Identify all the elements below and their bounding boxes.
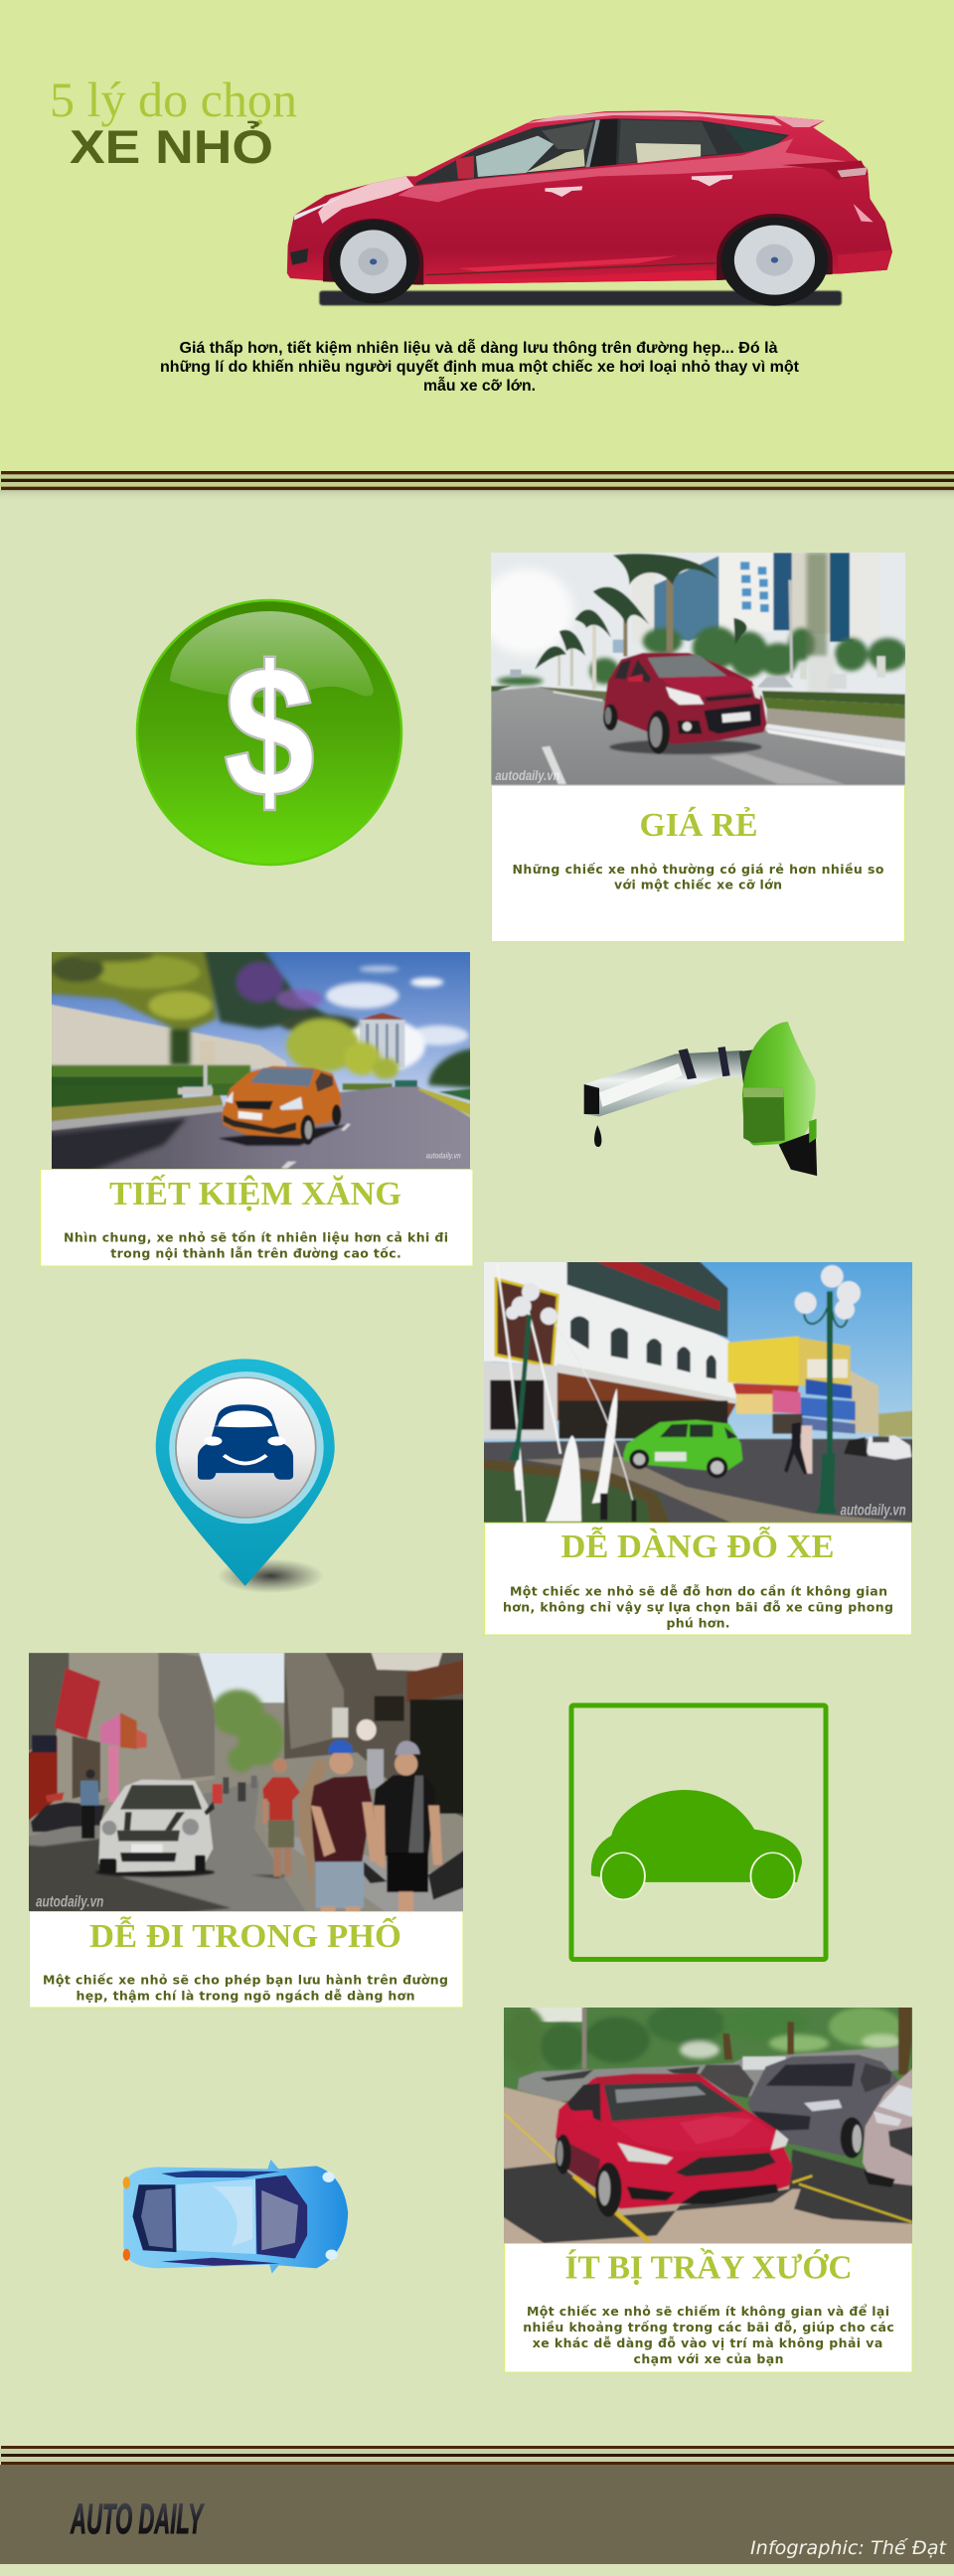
fountain pool — [481, 1465, 670, 1524]
rear wheel — [721, 217, 828, 306]
watermark: autodaily.vn — [426, 1151, 461, 1160]
pedestrian: woman behind — [299, 1757, 329, 1905]
right buildings — [284, 1650, 466, 1819]
description: Những chiếc xe nhỏ thường có giá rẻ hơn nhiều so — [513, 862, 884, 877]
photo: green car by fountain on street — [484, 1262, 912, 1523]
pedestrians — [784, 1422, 809, 1474]
road — [481, 1439, 915, 1524]
intro paragraph — [160, 338, 800, 395]
caption box — [30, 1912, 463, 2008]
description: với một chiếc xe cỡ lớn — [614, 877, 782, 892]
pedestrian: red shirt — [262, 1758, 300, 1876]
icon: green fuel pump nozzle — [584, 1022, 817, 1176]
icon: blue car top view — [123, 2160, 348, 2274]
ground — [501, 2086, 915, 2245]
panel: giá rẻ — [480, 549, 909, 942]
title line 1: 5 lý do chọn — [50, 72, 297, 127]
photo: orange car on tree-lined road — [52, 952, 470, 1169]
description: hẹp, thậm chí là trong ngõ ngách dễ dàng hơn — [76, 1988, 415, 2004]
description: xe khác dễ dàng đỗ vào vị trí mà không phải va — [533, 2335, 882, 2350]
title line 2: XE NHỎ — [70, 120, 273, 173]
description: nhiều khoảng trống trong các bãi đỗ, giúp cho các — [523, 2320, 894, 2334]
yellow bays — [504, 2114, 557, 2163]
pedestrian: maroon shirt — [311, 1740, 380, 1915]
panel: dễ dàng đỗ xe — [481, 1258, 915, 1635]
photo: red hatchback on city road — [491, 553, 905, 785]
description: Nhìn chung, xe nhỏ sẽ tốn ít nhiên liệu hơn cả khi đi — [64, 1230, 448, 1244]
hotel building — [481, 1258, 737, 1399]
credit: Infographic: Thế Đạt — [750, 2537, 948, 2559]
fountain jets — [514, 1388, 617, 1522]
grey SUV — [747, 2055, 898, 2159]
pedestrian: black shirt — [374, 1741, 442, 1915]
ground shadow — [319, 291, 842, 305]
hedges and grass — [48, 1065, 250, 1085]
icon: map pin with smiling car — [156, 1359, 335, 1593]
caption box — [40, 1169, 473, 1266]
heading: DỄ ĐI TRONG PHỐ — [89, 1916, 401, 1955]
scooters — [213, 1776, 257, 1804]
roof highlight — [526, 112, 782, 126]
heading: ÍT BỊ TRẦY XƯỚC — [564, 2248, 853, 2286]
colourful buildings — [727, 1336, 799, 1385]
intro paragraph: Giá thấp hơn, tiết kiệm nhiên liệu và dễ dàng lưu thông trên đường hẹp... Đó là — [179, 338, 778, 357]
panel: tiết kiệm xăng — [40, 949, 475, 1266]
icon: green dollar coin: $ — [225, 629, 314, 835]
description: trong nội thành lẫn trên đường cao tốc. — [110, 1246, 401, 1260]
icon: green dollar coin — [137, 600, 401, 865]
description: chạm với xe của bạn — [634, 2351, 783, 2366]
windows — [416, 118, 789, 185]
description — [503, 1584, 893, 1630]
dappled shadow — [26, 1839, 287, 1915]
pillar — [585, 118, 618, 167]
description: Một chiếc xe nhỏ sẽ chiếm ít không gian và để lại — [527, 2304, 889, 2319]
heading: DỄ DÀNG ĐỖ XE — [560, 1526, 835, 1565]
shadow on ground — [501, 2150, 915, 2243]
red car — [556, 2074, 792, 2217]
panel: ít bị trầy xước — [501, 2004, 915, 2372]
green car — [623, 1420, 742, 1478]
description: hơn, không chỉ vậy sự lựa chọn bãi đỗ xe cũng phong — [503, 1600, 893, 1614]
rear window tone — [618, 120, 717, 164]
car body — [287, 110, 892, 285]
car — [603, 653, 767, 754]
caption box — [485, 1523, 912, 1635]
intro paragraph: mẫu xe cỡ lớn. — [423, 376, 536, 395]
spoiler highlight — [773, 116, 825, 127]
white car — [867, 1435, 911, 1460]
road — [48, 1087, 475, 1175]
quarter glass — [723, 125, 785, 152]
car glyph — [198, 1404, 293, 1480]
photo: red car in parking lot — [504, 2008, 912, 2243]
far row of cars — [518, 2046, 898, 2101]
mirror — [456, 156, 474, 179]
front wheel — [329, 220, 419, 303]
rear seat — [636, 143, 701, 163]
rear details — [781, 161, 869, 180]
description — [43, 1972, 448, 2004]
belt-line highlight — [398, 138, 866, 202]
icon: green car in square frame — [571, 1705, 826, 1960]
hero image: red hatchback side view — [287, 110, 892, 306]
intro paragraph: những lí do khiến nhiều người quyết định mua một chiếc xe hơi loại nhỏ thay vì một — [160, 359, 800, 376]
caption box — [505, 2244, 912, 2372]
caption box — [491, 785, 904, 942]
heading: TIẾT KIỆM XĂNG — [109, 1174, 401, 1212]
lower sill — [458, 255, 678, 271]
description: Một chiếc xe nhỏ sẽ dễ đỗ hơn do cần ít không gian — [510, 1584, 887, 1598]
oil drop — [594, 1125, 601, 1147]
palm trees — [559, 568, 670, 689]
description: Một chiếc xe nhỏ sẽ cho phép bạn lưu hành trên đường — [43, 1972, 448, 1988]
heading: GIÁ RẺ — [640, 806, 757, 844]
parked motorbikes — [31, 1802, 105, 1832]
road — [491, 687, 905, 785]
logo: AUTO DAILY: AUTO DAILY — [70, 2496, 205, 2543]
header background — [0, 0, 954, 490]
right silver SUV — [863, 2066, 915, 2187]
panel: dễ đi trong phố — [26, 1650, 466, 2008]
description — [64, 1230, 448, 1260]
description: phú hơn. — [666, 1616, 729, 1630]
description — [523, 2304, 894, 2366]
car — [219, 1065, 346, 1146]
left buildings — [26, 1650, 215, 1822]
road — [26, 1781, 307, 1915]
street lamps — [509, 1291, 837, 1514]
watermark: autodaily.vn — [36, 1893, 103, 1910]
door handles — [545, 186, 582, 197]
description — [513, 862, 884, 892]
front vent — [290, 248, 308, 265]
footer band — [0, 2465, 954, 2564]
front window interior — [476, 136, 554, 177]
watermark: autodaily.vn — [495, 767, 559, 783]
wheel arches — [323, 219, 423, 285]
title: 5 lý do chọn xe nhỏ — [50, 72, 297, 173]
mini car — [95, 1780, 215, 1877]
blurred trees — [48, 949, 475, 1088]
photo: mini car and pedestrians on street — [29, 1653, 463, 1911]
